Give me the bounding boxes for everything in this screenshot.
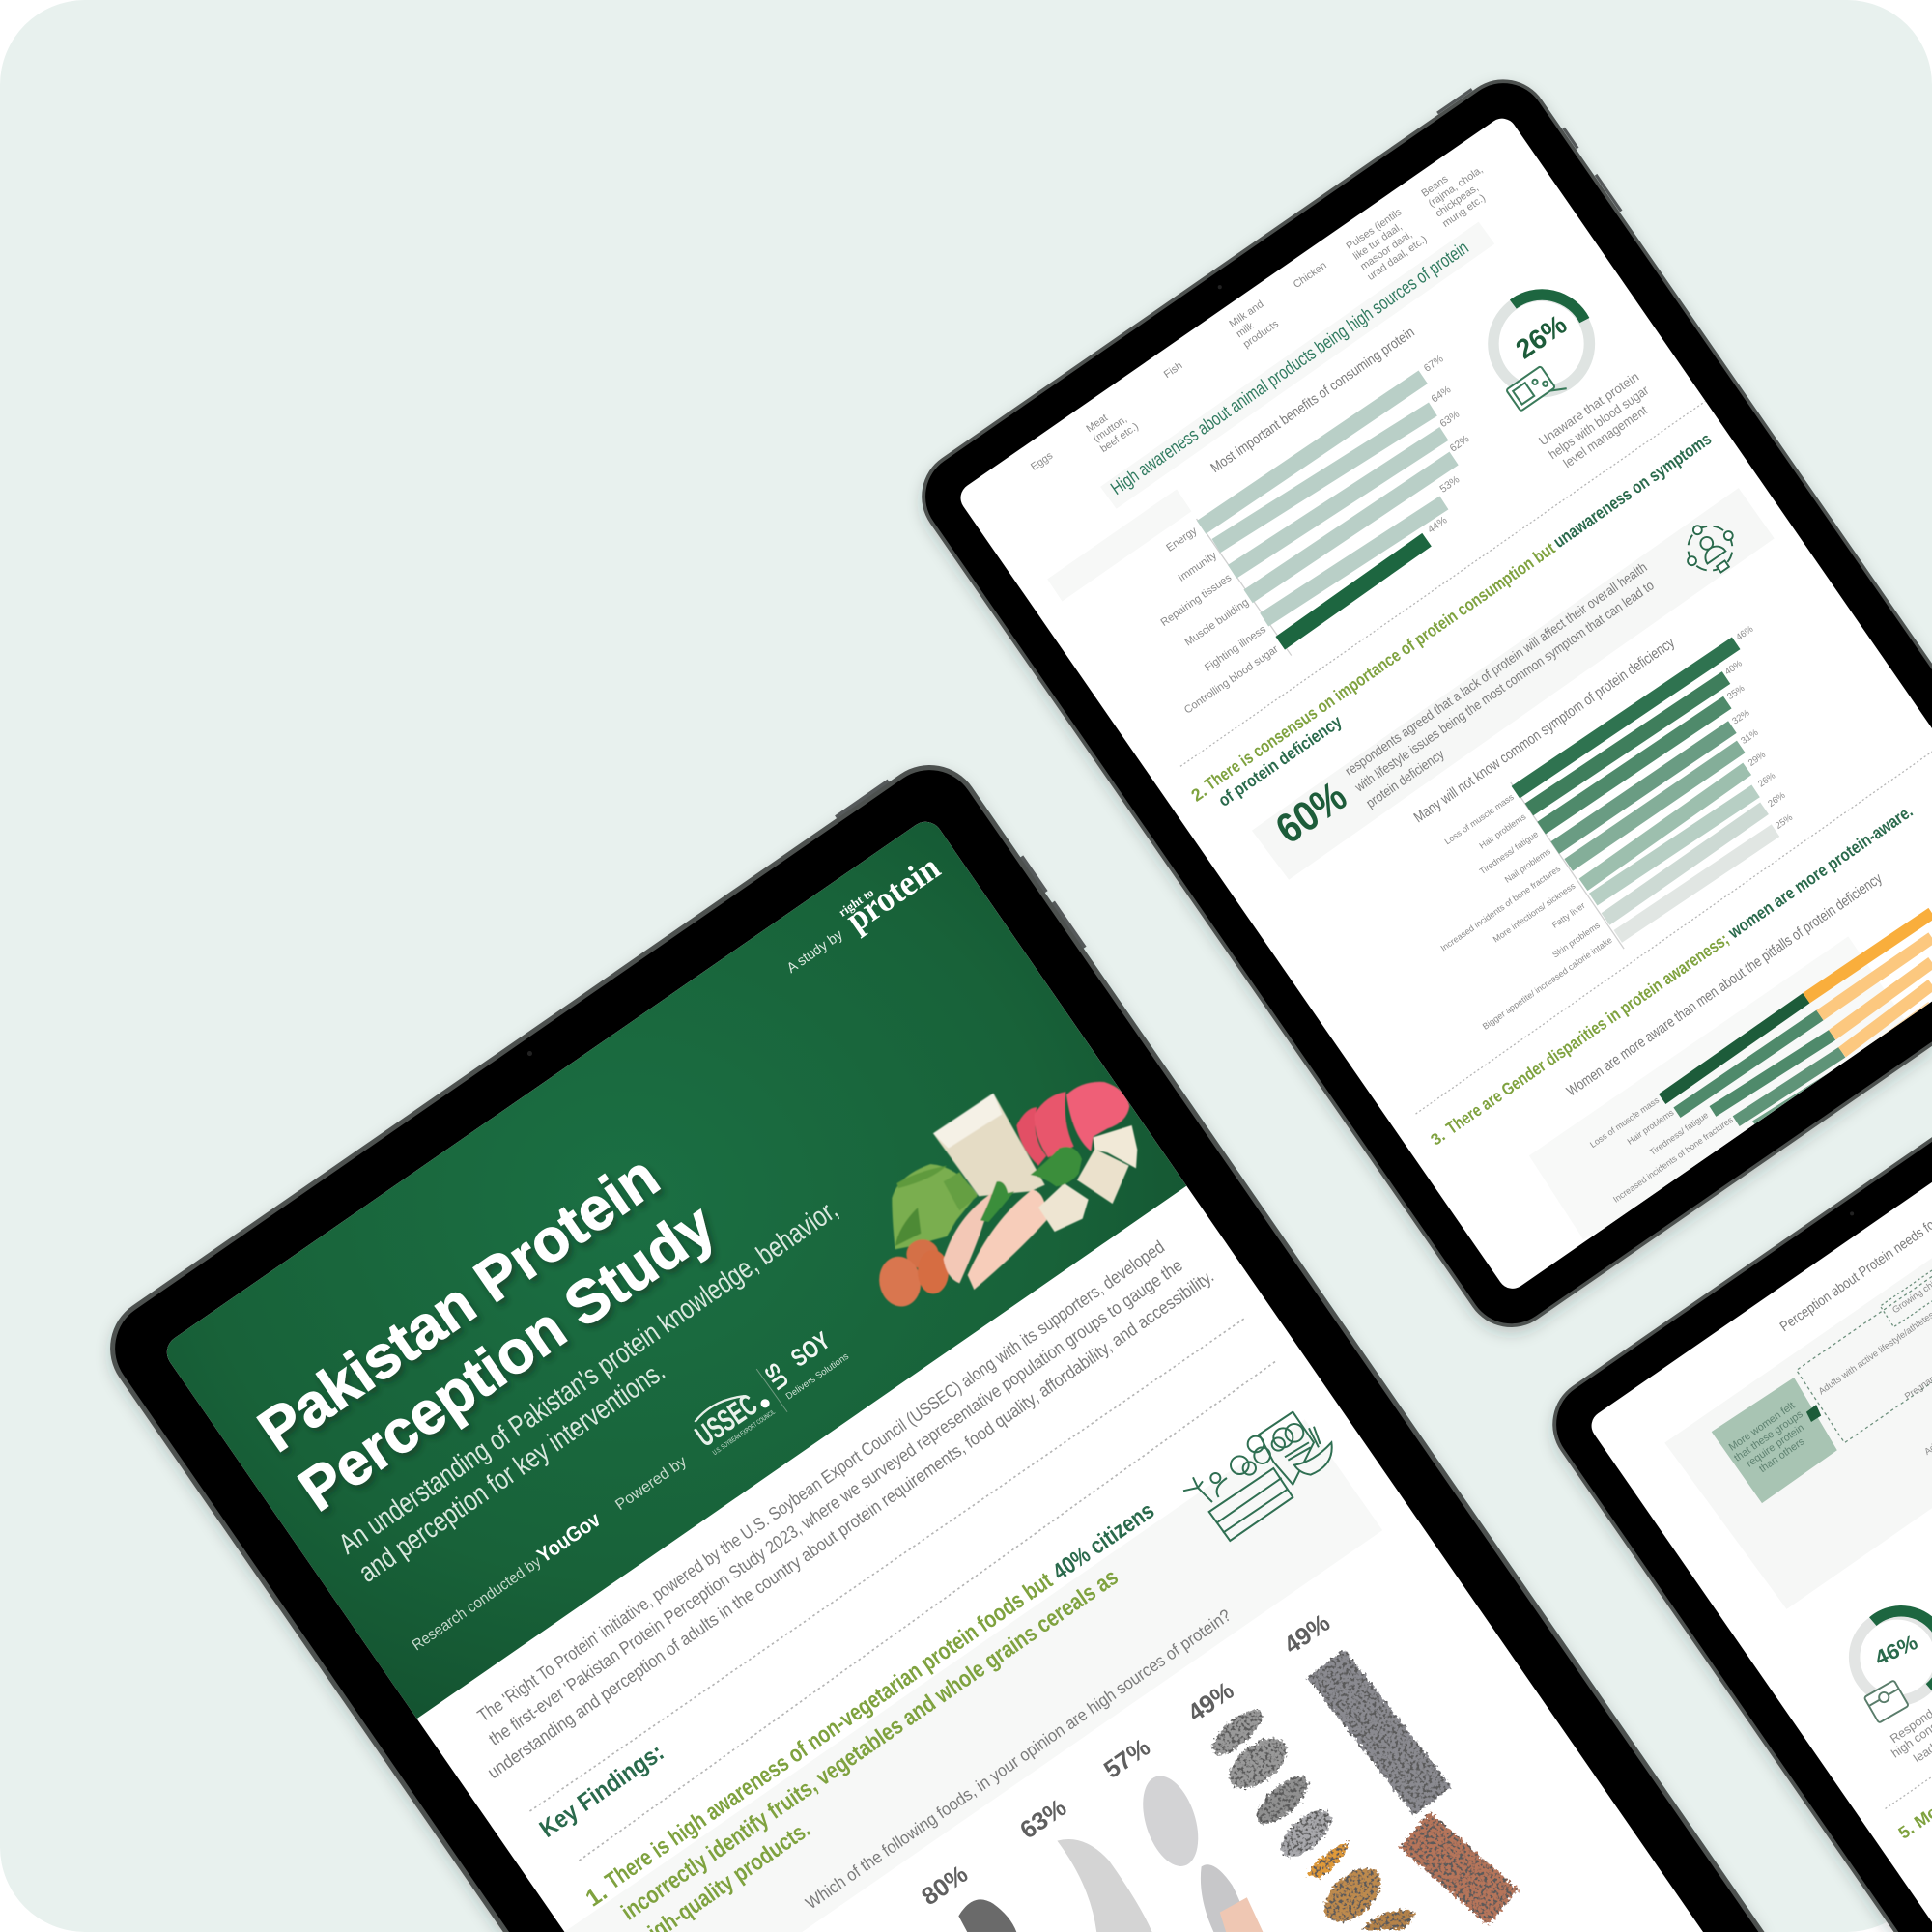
bar chart: benefits of protein: 44%	[1426, 514, 1450, 536]
food category labels: (rajma, chola,	[1427, 164, 1485, 210]
heading: finding 2: 2.	[1187, 781, 1210, 806]
heading: finding 2: of protein deficiency	[1214, 712, 1346, 810]
donut: 46%	[1855, 1611, 1932, 1700]
grey band: finding 2	[1252, 488, 1775, 880]
heading: key findings: Key Findings:	[535, 1739, 668, 1843]
logo: right to protein: protein	[838, 847, 947, 939]
bar chart: benefits of protein: Immunity	[1177, 550, 1219, 584]
food category labels: mung etc.)	[1440, 192, 1488, 230]
caption: unaware blood sugar: helps with blood sugar	[1546, 383, 1652, 462]
food category labels: beef etc.)	[1098, 421, 1141, 455]
callout: more women felt	[1712, 1378, 1837, 1503]
bar chart: benefits of protein: 64%	[1430, 384, 1454, 406]
caption: unaware blood sugar: level management	[1561, 403, 1650, 470]
food photo: protein foods collage	[875, 1082, 1137, 1310]
tablet: upper right, findings 1-3	[922, 57, 1932, 1327]
percent labels: 63%	[1015, 1794, 1071, 1844]
bar chart: symptoms: 31%	[1739, 727, 1761, 747]
bar chart: benefits of protein: Muscle building	[1183, 597, 1251, 648]
food images: grey and colour protein sources	[958, 1663, 1503, 1932]
logo: US SOY: US	[761, 1358, 794, 1393]
bar chart: benefits of protein: Energy	[1164, 525, 1200, 554]
green header	[167, 822, 1186, 1719]
callout: more women felt: More women felt	[1727, 1400, 1797, 1454]
heading: finding 1: 1.	[582, 1880, 612, 1912]
paragraph: 60% respondents: respondents agreed that a lack of protein will affect their overall health	[1342, 559, 1650, 779]
callout: more women felt: require protein	[1745, 1422, 1806, 1470]
bar chart: gender awareness: Hair problems	[1626, 1107, 1676, 1147]
bar chart: symptoms: Hair problems	[1478, 811, 1528, 851]
icon: weighing scale	[1864, 1680, 1909, 1723]
logo: US SOY: Delivers Solutions	[784, 1351, 851, 1402]
percent labels: 80%	[917, 1861, 973, 1911]
bar chart: gender awareness	[1588, 913, 1932, 1205]
bar chart: symptoms: Loss of muscle mass	[1443, 792, 1516, 846]
stat: 60%: 60%	[1268, 773, 1355, 853]
bar chart: symptoms: Increased incidents of bone fractures	[1439, 864, 1563, 953]
subheading: symptoms chart: Many will not know common symptom of protein deficiency	[1411, 635, 1678, 826]
credit: research conducted by: Research conducted by	[410, 1553, 544, 1654]
logo: right to protein: right to	[837, 886, 876, 920]
bar chart: gender awareness: Tiredness/ fatigue	[1648, 1110, 1710, 1157]
percent labels: 49%	[1279, 1609, 1335, 1660]
donut: 46%: 46%	[1871, 1630, 1921, 1670]
food category labels: Beans	[1419, 173, 1451, 200]
intro paragraph: the first-ever 'Pakistan Protein Perception Study 2023, where we surveyed representative population groups to gauge the	[485, 1255, 1186, 1749]
heading: finding 2: unawareness on symptoms	[1549, 429, 1715, 552]
bar chart: benefits of protein: 63%	[1437, 409, 1462, 430]
callout: more women felt: than others	[1757, 1435, 1807, 1475]
group labels	[1817, 1310, 1932, 1458]
caption: unaware blood sugar: Unaware that protein	[1536, 369, 1641, 448]
bar chart: benefits of protein: Fighting illness	[1203, 623, 1268, 674]
percent labels: 49%	[1183, 1677, 1239, 1727]
food category labels: (mutton,	[1092, 413, 1129, 445]
intro paragraph: understanding and perception of adults in the country about protein requirements, food quality, affordability, and accessibility.	[484, 1265, 1217, 1782]
bar chart: symptoms: 46%	[1734, 624, 1756, 643]
bar chart: benefits of protein: 53%	[1437, 473, 1462, 496]
bar chart: symptoms: 32%	[1730, 707, 1752, 726]
device frame: lower left	[110, 740, 1765, 1932]
bar chart: symptoms: 29%	[1747, 750, 1768, 769]
food category labels: chickpeas,	[1434, 183, 1481, 220]
grey band: section heading	[1047, 222, 1494, 601]
bar chart: symptoms: Nail problems	[1503, 846, 1552, 885]
paragraph: 60% respondents: protein deficiency	[1363, 746, 1447, 810]
bar chart: symptoms	[1439, 624, 1795, 1032]
heading: high awareness: High awareness about animal products being high sources of protein	[1108, 238, 1472, 499]
logo: USSEC	[694, 1395, 775, 1455]
heading: finding 3: There are Gender disparities in protein awareness;	[1442, 929, 1732, 1138]
credit: a study by: A study by	[784, 927, 846, 977]
grey band: perception panel	[1664, 1258, 1932, 1609]
food category labels: milk	[1235, 320, 1257, 340]
credit: powered by: Powered by	[612, 1453, 690, 1514]
bar chart: symptoms: Skin problems	[1550, 920, 1602, 959]
title: Pakistan Protein	[246, 1142, 670, 1465]
grey band: finding 1	[1215, 1423, 1321, 1533]
bar chart: symptoms: 25%	[1774, 812, 1795, 832]
bar chart: symptoms: Tiredness/ fatigue	[1478, 829, 1540, 876]
intro paragraph: The 'Right To Protein' initiative, powered by the U.S. Soybean Export Council (USSEC) along with its supporters, developed	[473, 1236, 1168, 1725]
heading: finding 3	[1427, 802, 1917, 1150]
bar chart: benefits of protein	[1159, 353, 1472, 717]
bar chart: symptoms: 26%	[1756, 770, 1778, 790]
bar chart: symptoms: 35%	[1725, 683, 1747, 702]
food category labels: urad daal, etc.)	[1365, 234, 1430, 283]
title: Perception Study	[287, 1191, 727, 1524]
bar chart: gender awareness: Increased incidents of bone fractures	[1611, 1115, 1735, 1205]
icon: glucose meter	[1506, 361, 1567, 417]
grey band: finding 3 chart	[1529, 936, 1932, 1239]
bar chart: symptoms: Fatty liver	[1550, 900, 1587, 930]
bar chart: benefits of protein: Controlling blood sugar	[1182, 643, 1281, 717]
subtitle: An understanding of Pakistan's protein knowledge, behavior,	[333, 1193, 843, 1560]
heading: finding 2	[1187, 429, 1715, 810]
bar chart: symptoms: 40%	[1723, 658, 1745, 677]
percent labels	[917, 1609, 1335, 1911]
food category labels: Eggs	[1029, 449, 1056, 473]
food category labels: masoor daal,	[1358, 229, 1414, 272]
food category labels: like tur daal,	[1351, 221, 1405, 263]
bar chart: gender awareness: Loss of muscle mass	[1588, 1094, 1662, 1150]
bar chart: benefits of protein: 67%	[1422, 353, 1446, 375]
dashed label: growing children	[1880, 1267, 1932, 1327]
bar chart: benefits of protein: Repairing tissues	[1159, 572, 1235, 629]
credit: research conducted by	[412, 1514, 599, 1650]
logo: USSEC: USSEC	[689, 1387, 763, 1453]
logo: US SOY: SOY	[786, 1327, 836, 1373]
dashed group box	[1797, 1276, 1932, 1443]
food category labels: Fish	[1162, 360, 1184, 381]
food category labels: Chicken	[1292, 260, 1329, 291]
logo: US SOY	[765, 1331, 848, 1399]
subtitle	[333, 1193, 843, 1589]
bar chart: symptoms: Bigger appetite/ increased calorie intake	[1481, 935, 1614, 1032]
percent labels: 57%	[1099, 1734, 1155, 1784]
device frame: upper right	[922, 57, 1932, 1327]
bar chart: symptoms: 26%	[1766, 790, 1788, 810]
heading: finding 3: 3.	[1427, 1126, 1449, 1150]
paragraph: 60% respondents: with lifestyle issues being the most common symptom that can lead to	[1351, 577, 1657, 795]
screen contents: report cover	[167, 822, 1503, 1932]
food category labels: products	[1241, 318, 1281, 351]
question text: Which of the following foods, in your opinion are high sources of protein?	[802, 1605, 1235, 1913]
food category labels: Meat	[1084, 412, 1110, 435]
bar chart: benefits of protein: 62%	[1448, 433, 1472, 455]
icon: crate of vegetables	[1183, 1412, 1332, 1541]
logo: USSEC: U.S. SOYBEAN EXPORT COUNCIL	[712, 1409, 777, 1457]
food category labels	[1029, 154, 1499, 473]
subheading: benefits chart: Most important benefits of consuming protein	[1208, 325, 1418, 476]
credit: research conducted by: YouGov	[532, 1507, 605, 1568]
bar chart: symptoms: More infections/ sickness	[1492, 881, 1577, 945]
device frame: lower right	[1552, 1137, 1932, 1932]
donut: 26%	[1493, 295, 1589, 392]
screen contents: findings 4-5	[1664, 1215, 1932, 1843]
callout: more women felt: that these groups	[1732, 1408, 1805, 1464]
donut: 26%: 26%	[1511, 309, 1572, 364]
screen contents: findings 1-3	[1029, 154, 1932, 1239]
heading: finding 1: 40% citizens	[1048, 1497, 1159, 1585]
tablet: lower left, report cover	[110, 740, 1765, 1932]
icon: person with foods	[1673, 511, 1747, 584]
heading: finding 1: incorrectly identify fruits, vegetables and whole grains cereals as	[617, 1564, 1123, 1925]
food category labels: Milk and	[1227, 298, 1265, 330]
tablet: lower right, findings 4-5	[1552, 1137, 1932, 1932]
food category labels: Pulses (lentils	[1345, 206, 1405, 252]
subtitle: and perception for key interventions.	[353, 1355, 670, 1589]
heading: finding 2: There is consensus on importance of protein consumption but	[1201, 538, 1558, 794]
heading: finding 1: There is high awareness of non-vegetarian protein foods but	[601, 1568, 1058, 1895]
